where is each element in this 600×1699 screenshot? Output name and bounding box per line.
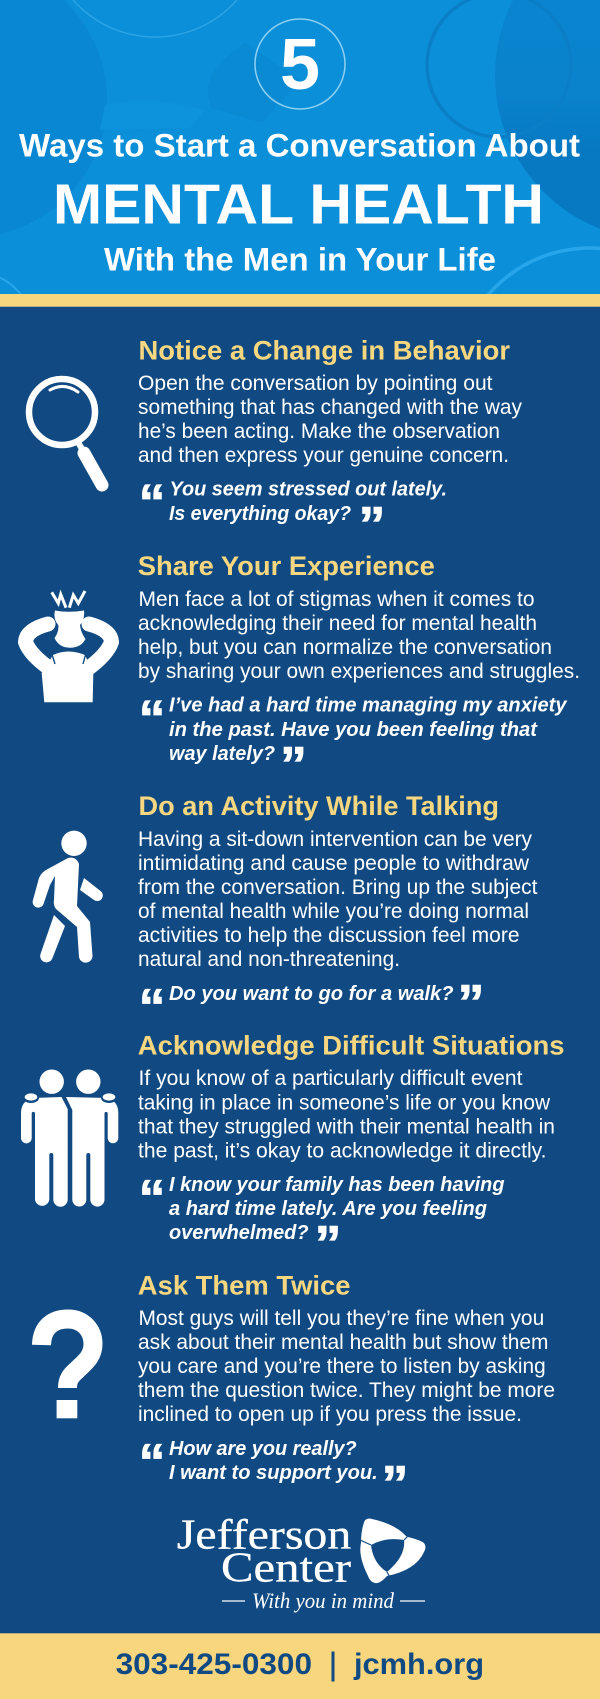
quote: “ xyxy=(138,979,166,1035)
number badge: 5 xyxy=(280,25,320,105)
panel: ask them twice xyxy=(42,1270,555,1512)
header banner xyxy=(0,0,600,294)
quote xyxy=(138,1434,408,1512)
quote: ” xyxy=(358,496,386,552)
body text xyxy=(138,588,580,683)
body text: natural and non-threatening. xyxy=(138,948,400,971)
logo wordmark: Jefferson xyxy=(177,1512,351,1558)
icon: question mark xyxy=(42,1319,93,1418)
footer contact text: jcmh.org xyxy=(353,1648,484,1681)
icon: stressed man xyxy=(26,591,112,702)
body text xyxy=(138,1067,555,1162)
heading: Acknowledge Difficult Situations xyxy=(138,1030,565,1060)
body text: Men face a lot of stigmas when it comes to xyxy=(138,588,534,611)
title: Ways to Start a Conversation About xyxy=(19,128,580,164)
body text: If you know of a particularly difficult event xyxy=(138,1067,523,1090)
quote: “ xyxy=(138,1170,166,1226)
panel: do an activity xyxy=(33,791,538,1035)
quote: ” xyxy=(458,974,484,1030)
quote: ” xyxy=(314,1216,342,1272)
heading: Share Your Experience xyxy=(138,551,435,581)
body text: of mental health while you’re doing normal xyxy=(138,900,529,923)
quote: a hard time lately. Are you feeling xyxy=(169,1198,487,1220)
body text: taking in place in someone’s life or you know xyxy=(138,1091,551,1114)
icon: magnifying glass xyxy=(29,379,102,485)
body text: Most guys will tell you they’re fine when you xyxy=(138,1307,544,1330)
quote: “ xyxy=(138,474,166,530)
footer contact text xyxy=(116,1648,484,1682)
body text: Open the conversation by pointing out xyxy=(138,372,493,395)
body text: intimidating and cause people to withdraw xyxy=(138,852,530,875)
body text xyxy=(138,372,522,467)
heading: Notice a Change in Behavior xyxy=(138,335,510,365)
body text: that they struggled with their mental health in xyxy=(138,1115,555,1138)
quote: I know your family has been having xyxy=(169,1174,504,1196)
icon: walking person xyxy=(33,831,103,963)
quote: ” xyxy=(280,736,307,792)
logo mark xyxy=(360,1519,426,1583)
quote xyxy=(138,474,447,552)
quote: I want to support you. xyxy=(169,1462,378,1484)
footer band xyxy=(0,1633,600,1699)
body text: inclined to open up if you press the issue. xyxy=(138,1403,522,1426)
quote: Is everything okay? xyxy=(169,503,351,525)
body text: you care and you’re there to listen by asking xyxy=(138,1355,546,1378)
body text: activities to help the discussion feel more xyxy=(138,924,520,947)
panel: acknowledge difficult situations xyxy=(21,1030,564,1272)
footer contact text: 303-425-0300 xyxy=(116,1648,312,1681)
body text: them the question twice. They might be more xyxy=(138,1379,555,1402)
quote: I’ve had a hard time managing my anxiety xyxy=(169,694,567,716)
quote: How are you really? xyxy=(169,1438,357,1460)
quote: Do you want to go for a walk? xyxy=(169,983,454,1005)
gold divider band xyxy=(0,294,600,307)
body text: ask about their mental health but show them xyxy=(138,1331,548,1354)
body text xyxy=(138,828,538,971)
body text: help, but you can normalize the conversation xyxy=(138,636,552,659)
heading: Do an Activity While Talking xyxy=(138,791,499,821)
title xyxy=(19,128,580,278)
body text: he’s been acting. Make the observation xyxy=(138,420,500,443)
panel: share your experience xyxy=(26,551,580,792)
body text: from the conversation. Bring up the subject xyxy=(138,876,538,899)
heading: Ask Them Twice xyxy=(138,1270,350,1300)
quote xyxy=(138,1170,504,1272)
quote xyxy=(138,690,567,792)
body text: and then express your genuine concern. xyxy=(138,444,509,467)
logo wordmark xyxy=(177,1512,351,1592)
title: With the Men in Your Life xyxy=(104,242,496,278)
quote xyxy=(138,974,484,1035)
icon: two men with arms on shoulders xyxy=(21,1070,118,1207)
quote: overwhelmed? xyxy=(169,1222,308,1244)
quote: ” xyxy=(382,1456,408,1512)
quote: in the past. Have you been feeling that xyxy=(169,719,538,741)
body text: acknowledging their need for mental health xyxy=(138,612,537,635)
quote: way lately? xyxy=(169,743,275,765)
logo: Jefferson Center xyxy=(177,1512,426,1613)
title: MENTAL HEALTH xyxy=(53,172,544,236)
number badge xyxy=(255,19,345,109)
logo wordmark: Center xyxy=(221,1546,351,1592)
body text: the past, it’s okay to acknowledge it directly. xyxy=(138,1139,546,1162)
body text: something that has changed with the way xyxy=(138,396,522,419)
panel: notice a change xyxy=(29,335,522,552)
quote: “ xyxy=(138,1434,166,1490)
logo tagline: With you in mind xyxy=(252,1588,395,1613)
quote: You seem stressed out lately. xyxy=(170,478,447,500)
body text: Having a sit-down intervention can be very xyxy=(138,828,532,851)
body text xyxy=(138,1307,555,1426)
body text: by sharing your own experiences and struggles. xyxy=(138,660,580,683)
quote: “ xyxy=(138,690,166,746)
